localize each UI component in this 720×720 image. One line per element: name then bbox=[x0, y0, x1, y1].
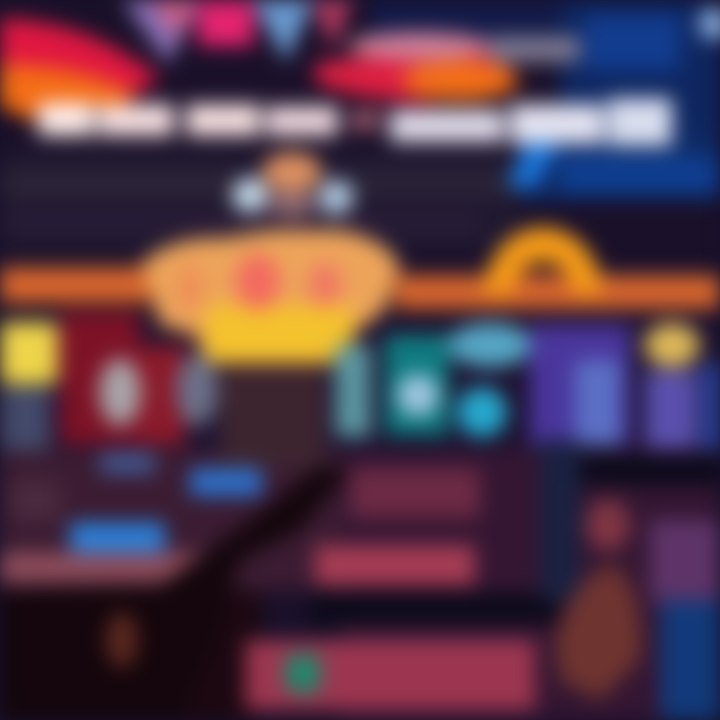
machine: teal bbox=[385, 323, 532, 437]
heading (illegible blurred title band) bbox=[38, 98, 672, 146]
left tables bbox=[0, 452, 262, 582]
machine: red bbox=[60, 312, 185, 445]
arch sign bbox=[484, 227, 602, 294]
hand glow bbox=[106, 612, 138, 668]
right blue lights bbox=[506, 8, 720, 192]
green chip bbox=[286, 654, 320, 692]
machine: grey centre bbox=[176, 345, 371, 468]
slot machines row bbox=[0, 312, 720, 468]
machine: right bbox=[644, 323, 720, 450]
crown: jewel top bbox=[232, 152, 354, 218]
crown: body bbox=[142, 230, 400, 364]
top canopy bbox=[0, 0, 580, 120]
machine: yellow left bbox=[0, 322, 58, 450]
person at right bbox=[555, 499, 720, 720]
machine: purple bbox=[530, 325, 630, 445]
right tables bbox=[245, 468, 720, 710]
orange rail bbox=[0, 267, 720, 309]
crown bbox=[142, 152, 400, 364]
dark silhouettes bbox=[0, 440, 720, 720]
